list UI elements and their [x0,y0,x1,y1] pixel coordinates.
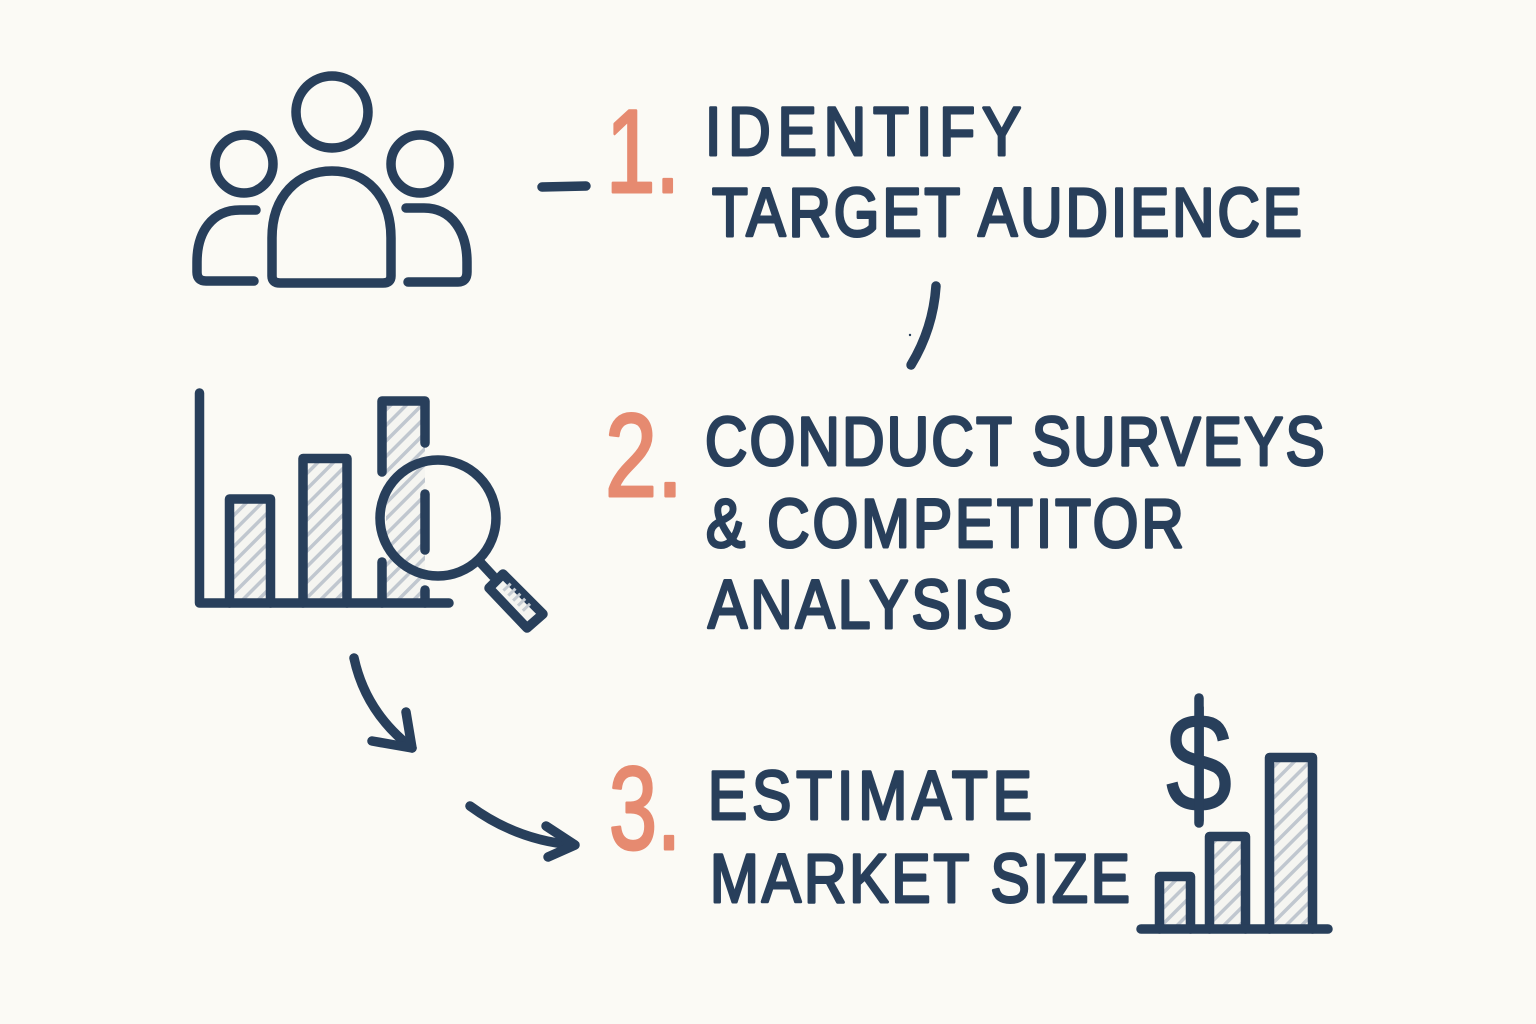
arrow: analysis curve [354,658,412,748]
step 2 heading: ANALYSIS [708,566,1012,643]
step 2 heading: CONDUCT SURVEYS [705,403,1325,480]
icon: dollar growth chart [1141,684,1328,929]
step 2 heading: & COMPETITOR [706,485,1184,562]
speck near connector [909,334,911,336]
chart bars [200,393,449,603]
dollar bar [1194,698,1204,823]
step 2 number: 2. [605,390,683,522]
magnifying glass [380,460,543,628]
step 1 heading: TARGET AUDIENCE [712,174,1302,251]
growth bars [1141,758,1328,929]
connector: people to step 1 [542,186,586,187]
icon: group of people [197,76,467,283]
dollar sign: $ [1166,684,1232,841]
step 3 heading: ESTIMATE [708,757,1032,834]
step 3 heading: MARKET SIZE [710,840,1130,917]
step 3 heading [708,757,1130,917]
connector: step 1 to step 2 [911,286,936,365]
step 3 number: 3. [609,743,681,875]
step 1 heading [705,93,1302,251]
step 1 number: 1. [606,86,680,218]
arrow: to step 3 [470,806,575,857]
step 2 heading [705,403,1325,643]
icon: bar chart with magnifying glass [200,393,543,628]
step 1 heading: IDENTIFY [705,93,1021,170]
